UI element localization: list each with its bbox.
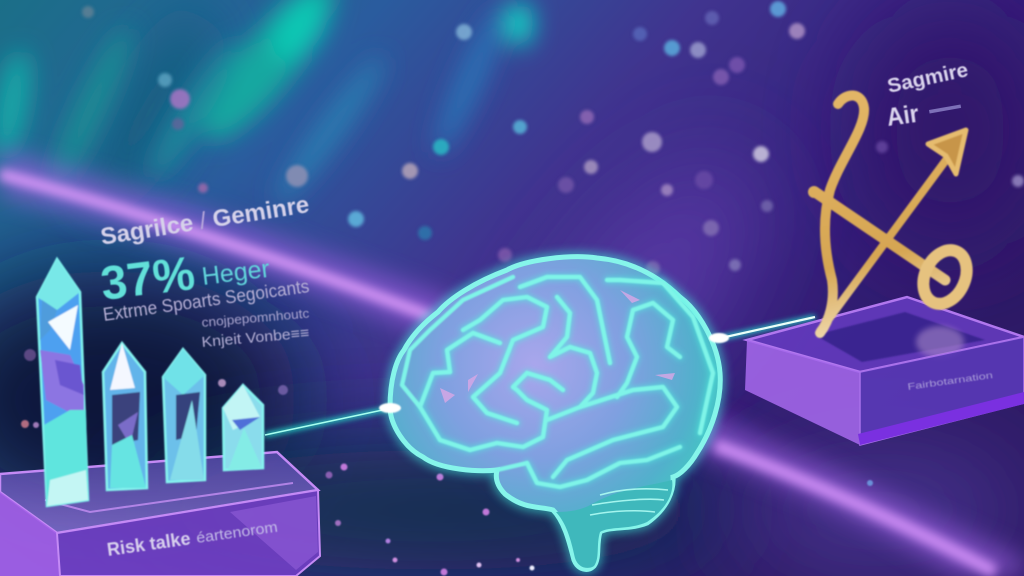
crystal bar 1 — [37, 259, 88, 506]
label: Air: Air — [885, 100, 921, 132]
crystal bar 4 — [223, 385, 263, 470]
platform right face — [860, 337, 1024, 445]
node glow: right of brain — [709, 333, 729, 343]
label dash — [929, 104, 961, 113]
bow limb — [820, 95, 864, 333]
stat: 37%: 37% — [98, 246, 198, 310]
cerebellum and brain stem — [556, 480, 672, 568]
description line: cnojpepomnhoutc: cnojpepomnhoutc — [201, 306, 310, 330]
heading: Sagmire: Sagmire — [885, 59, 970, 98]
background: teal aurora streaks — [0, 0, 533, 211]
brain body — [390, 257, 720, 569]
platform top surface — [0, 452, 318, 533]
platform left face — [0, 492, 60, 576]
platform inner rim — [45, 483, 293, 512]
platform top surface — [747, 297, 1024, 372]
icon: glowing brain — [390, 257, 720, 569]
arrow shaft — [820, 160, 946, 331]
bokeh particles — [82, 1, 1024, 275]
description line: Knjeit Vonbe: Knjeit Vonbe≡≡ — [201, 325, 310, 351]
platform front sheen — [230, 496, 318, 570]
platform label: Risk talke: Risk talke — [106, 528, 192, 560]
connector beam: crystals to brain — [265, 408, 392, 435]
text block: right zodiac label — [885, 59, 970, 132]
bow knob — [808, 186, 820, 198]
platform left face — [745, 340, 860, 445]
platform base glow — [858, 392, 1024, 445]
brain highlights — [440, 290, 675, 403]
brain halo — [390, 257, 720, 569]
icon: golden Sagittarius bow and arrow — [808, 95, 975, 333]
platform inner surface — [815, 312, 985, 362]
bokeh particles: lower field — [21, 349, 873, 576]
platform label: éartenorom: éartenorom — [195, 520, 279, 547]
crossbar — [815, 192, 945, 280]
crystal bar 2 — [103, 343, 147, 490]
panel: right glass platform — [745, 297, 1024, 445]
heading: Sagrilce / Geminre: Sagrilce / Geminre — [99, 191, 311, 251]
description: Extrme Spoarts Segoicants: Extrme Spoarts Segoicants — [102, 275, 311, 325]
crystal bar 3 — [163, 349, 205, 482]
node glow: left of brain — [379, 403, 401, 413]
connector beam: brain to bow — [712, 317, 815, 340]
stat label: Heger: Heger — [200, 255, 271, 291]
platform front face — [57, 490, 320, 576]
crossbar ring — [915, 243, 975, 311]
panel: crystal bar chart — [37, 259, 263, 506]
panel: left glass platform — [0, 452, 320, 576]
brain folds: sulci — [402, 277, 713, 487]
purple light streak — [0, 150, 1024, 576]
brain folds: glow — [420, 277, 713, 487]
arrow head — [928, 130, 966, 174]
reflection of ring — [916, 326, 964, 358]
text block: left statistics — [98, 191, 311, 560]
cerebellum ridges — [590, 489, 668, 515]
platform label: Fairbotarnation — [907, 370, 994, 393]
